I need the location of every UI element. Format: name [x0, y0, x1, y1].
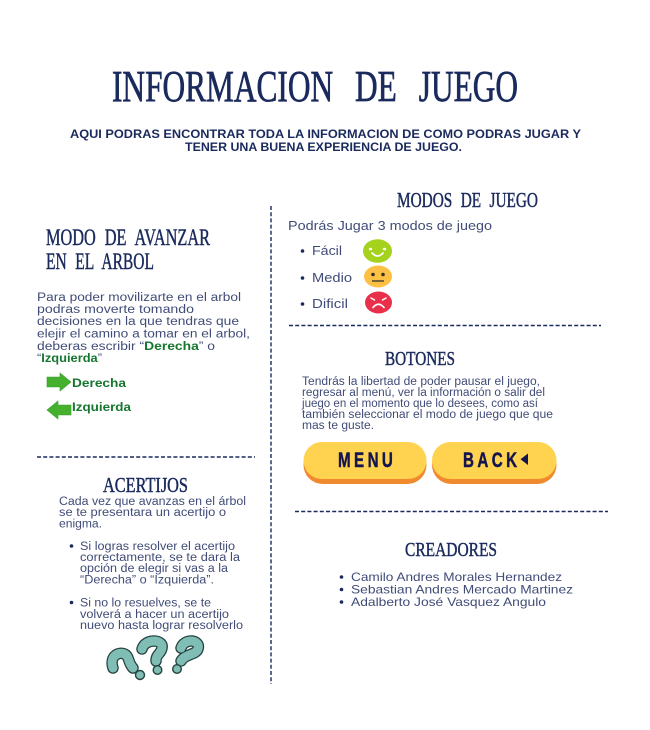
- list item: medio: Medio: [312, 271, 352, 285]
- heading: acertijos: ACERTIJOS: [103, 473, 188, 497]
- list: nombres de creadores: Camilo Andres Morales Hernandez: [351, 570, 562, 584]
- panel: modos de juego: [288, 188, 538, 314]
- text block: instrucciones de movimiento: [37, 292, 250, 365]
- list: reglas de acertijos: volverá a hacer un acertijo: [80, 609, 229, 621]
- heading: modo de avanzar: [46, 225, 210, 274]
- text block: instrucciones de movimiento: “Izquierda ”: [37, 353, 102, 365]
- list: nombres de creadores: [340, 570, 573, 609]
- list: reglas de acertijos: [70, 541, 243, 632]
- button: menu: MENU: [338, 447, 396, 472]
- icon: signos de pregunta: [112, 641, 198, 680]
- icon: cara feliz: [363, 239, 392, 263]
- heading: creadores: CREADORES: [405, 539, 497, 561]
- text block: descripcion botones: juego en el momento que lo desees, como así: [301, 398, 539, 410]
- button: back: BACK: [463, 447, 520, 472]
- list: reglas de acertijos: Si no lo resuelves, se te: [80, 598, 211, 610]
- list: reglas de acertijos: opción de elegir si vas a la: [80, 563, 229, 575]
- text block: instrucciones de movimiento: deberas escribir “ Derecha ” o: [37, 341, 215, 353]
- list: reglas de acertijos: “Derecha” o “Izquierda”.: [80, 574, 214, 586]
- label: derecha: Derecha: [72, 378, 127, 390]
- heading: modo de avanzar: EN EL ARBOL: [46, 249, 154, 274]
- panel: modo de avanzar: [37, 225, 250, 419]
- list item: dificil: Dificil: [312, 297, 348, 311]
- panel: acertijos: [59, 473, 246, 680]
- list: nombres de creadores: Sebastian Andres Mercado Martinez: [351, 582, 573, 596]
- text: tres modos: Podrás Jugar 3 modos de juego: [288, 218, 492, 233]
- text block: descripcion botones: [301, 376, 553, 432]
- icon: cara neutral: [364, 266, 392, 288]
- icon: cara triste: [365, 292, 392, 314]
- text block: descripcion botones: Tendrás la libertad de poder pausar el juego,: [302, 376, 540, 388]
- list item: medio: [301, 271, 352, 285]
- heading: modos de juego: MODOS DE JUEGO: [397, 188, 538, 212]
- text block: descripcion botones: regresar al menú, ver la información o salir del: [302, 387, 545, 399]
- button: back: [432, 442, 556, 484]
- text block: instrucciones de movimiento: Para poder movilizarte en el arbol: [37, 292, 241, 304]
- subtitle: AQUI PODRAS ENCONTRAR TODA LA INFORMACION DE COMO PODRAS JUGAR Y: [70, 129, 581, 141]
- heading: botones: BOTONES: [385, 348, 455, 370]
- subtitle: [70, 129, 581, 154]
- heading: modo de avanzar: MODO DE AVANZAR: [46, 225, 210, 250]
- button: menu: [304, 442, 426, 484]
- text block: introduccion acertijos: se te presentara un acertijo o: [59, 507, 226, 519]
- text block: introduccion acertijos: [59, 496, 246, 530]
- icon: flecha izquierda: [47, 401, 71, 419]
- panel: botones: [301, 348, 556, 484]
- text block: descripcion botones: mas te guste.: [302, 420, 374, 432]
- text block: instrucciones de movimiento: decisiones en la que tendras que: [37, 316, 239, 328]
- icon: flecha derecha: [47, 373, 71, 391]
- list: reglas de acertijos: nuevo hasta lograr resolverlo: [80, 620, 243, 632]
- list item: facil: [301, 244, 342, 258]
- text block: descripcion botones: también seleccionar el modo de juego que que: [302, 409, 553, 421]
- list: reglas de acertijos: Si logras resolver el acertijo: [80, 541, 235, 553]
- text block: introduccion acertijos: Cada vez que avanzas en el árbol: [59, 496, 246, 508]
- list item: dificil: [301, 297, 348, 311]
- panel: creadores: [340, 539, 573, 609]
- list: reglas de acertijos: correctamente, se te dara la: [80, 552, 241, 564]
- text block: introduccion acertijos: enigma.: [59, 518, 102, 530]
- list item: facil: Fácil: [312, 244, 342, 258]
- label: izquierda: Izquierda: [72, 402, 132, 414]
- text block: instrucciones de movimiento: elejir el camino a tomar en el arbol,: [37, 328, 250, 340]
- list: nombres de creadores: Adalberto José Vasquez Angulo: [351, 595, 546, 609]
- subtitle: TENER UNA BUENA EXPERIENCIA DE JUEGO.: [185, 142, 462, 154]
- text block: instrucciones de movimiento: podras moverte tomando: [37, 304, 194, 316]
